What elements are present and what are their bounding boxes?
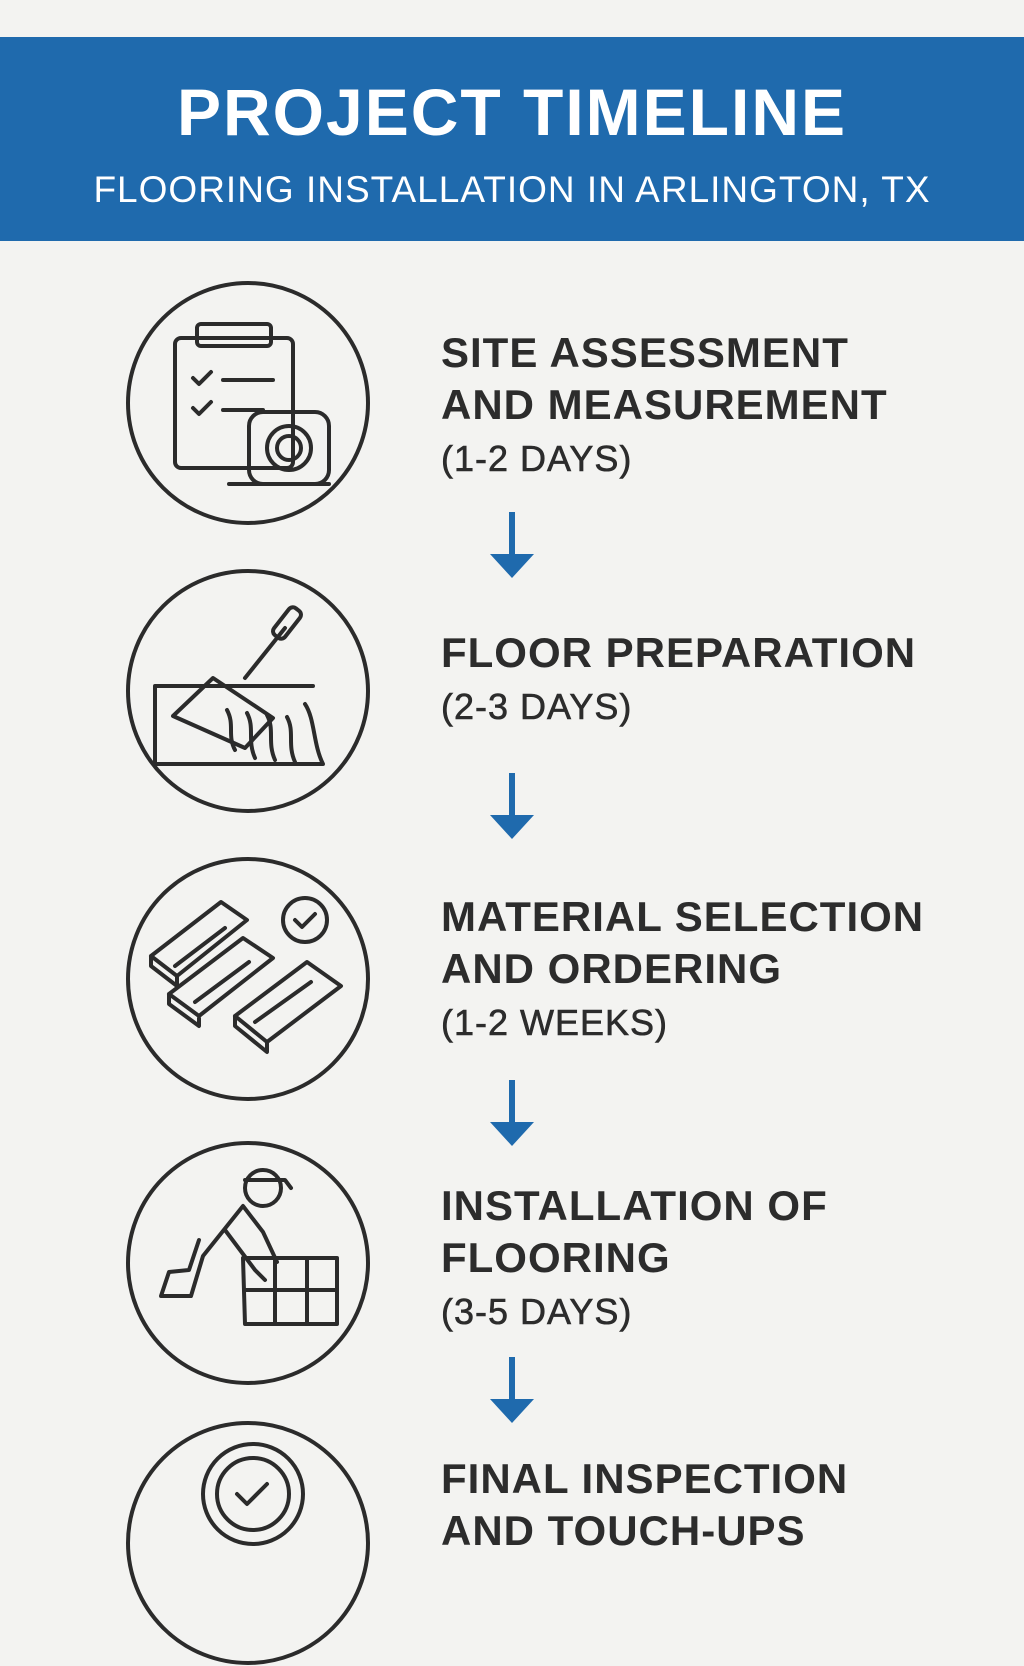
step 1 text: (1-2 DAYS) [441, 438, 632, 479]
arrow [490, 512, 534, 578]
icon: trowel and floor [126, 569, 370, 813]
icon: worker installing tiles [126, 1141, 370, 1385]
step 2 text [441, 629, 916, 727]
icon: clipboard and tape measure [126, 281, 370, 525]
step 5 text [441, 1455, 848, 1554]
step 3 text: MATERIAL SELECTION [441, 893, 924, 940]
step 2 text: FLOOR PREPARATION [441, 629, 916, 676]
step 1 text: SITE ASSESSMENT [441, 329, 849, 376]
step 3 text: AND ORDERING [441, 945, 782, 992]
icon: planks with check [126, 857, 370, 1101]
title: PROJECT TIMELINE [177, 75, 847, 149]
subtitle: FLOORING INSTALLATION IN ARLINGTON, TX [93, 169, 931, 210]
step 4 text: INSTALLATION OF [441, 1182, 828, 1229]
step 5 text: FINAL INSPECTION [441, 1455, 848, 1502]
step 4 text [441, 1182, 828, 1332]
arrow [490, 773, 534, 839]
step 4 text: FLOORING [441, 1234, 671, 1281]
icon: check badge [126, 1421, 370, 1665]
step 1 text [441, 329, 888, 479]
arrow [490, 1080, 534, 1146]
step 3 text [441, 893, 924, 1043]
step 2 text: (2-3 DAYS) [441, 686, 632, 727]
arrow [490, 1357, 534, 1423]
step 3 text: (1-2 WEEKS) [441, 1002, 668, 1043]
step 1 text: AND MEASUREMENT [441, 381, 888, 428]
step 5 text: AND TOUCH-UPS [441, 1507, 806, 1554]
step 4 text: (3-5 DAYS) [441, 1291, 632, 1332]
header [0, 37, 1024, 241]
